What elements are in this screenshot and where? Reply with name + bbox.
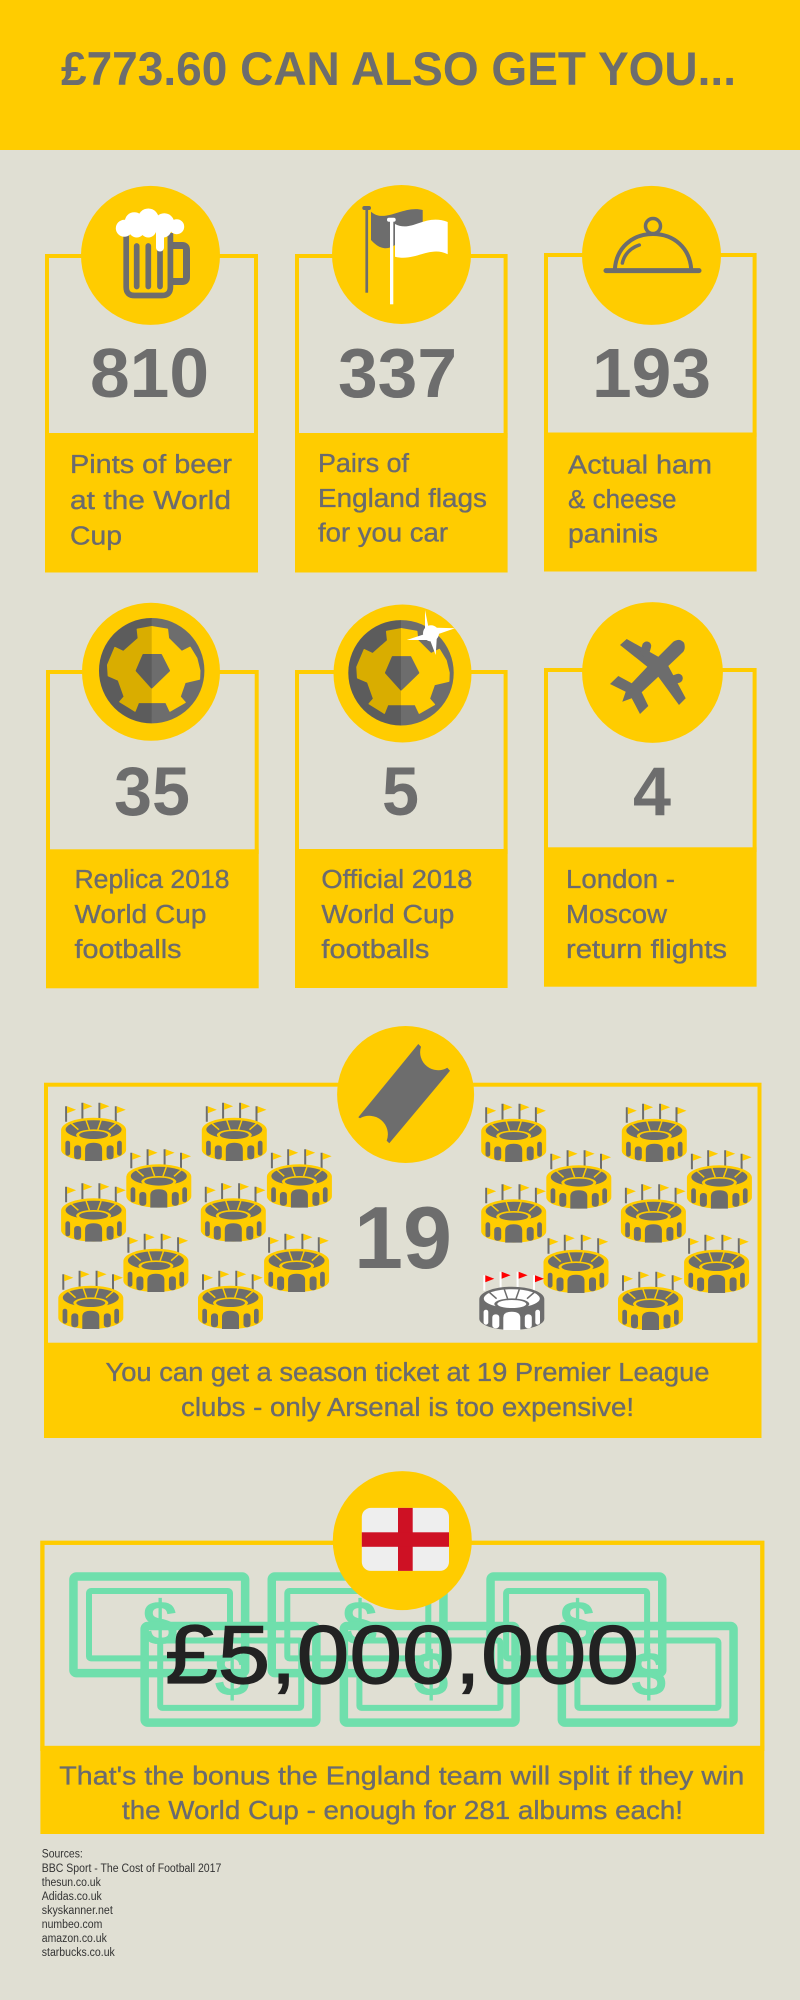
banknotes: $ [342, 1589, 377, 1659]
stadium: white Arsenal [479, 1272, 544, 1330]
panel: england flags [295, 185, 508, 572]
panel: pints of beer [45, 186, 258, 572]
label panel [295, 849, 508, 988]
caption [59, 1760, 744, 1825]
icon circle [81, 186, 220, 325]
banknotes: $ [214, 1640, 250, 1710]
sources [42, 1849, 221, 1959]
description: & cheese [568, 486, 676, 514]
caption band [40, 1746, 764, 1834]
panel: season tickets [44, 1026, 762, 1438]
description: footballs [74, 936, 182, 964]
label panel [544, 847, 757, 987]
description [321, 866, 472, 964]
number: 337 [338, 334, 457, 412]
sources: Sources: [42, 1849, 83, 1861]
description: Replica 2018 [74, 866, 230, 894]
icon circle [334, 604, 472, 742]
panel: England bonus [40, 1471, 764, 1834]
sources: skyskanner.net [42, 1905, 114, 1917]
icon: pair of flags [362, 206, 448, 304]
header band [0, 0, 800, 150]
caption: That's the bonus the England team will split if they win [59, 1760, 744, 1790]
number: 35 [114, 753, 190, 830]
number: 5 [382, 753, 419, 830]
banknotes [73, 1576, 734, 1723]
description: for you car [318, 520, 449, 548]
icon: football [99, 618, 204, 723]
icon circle [582, 602, 723, 743]
sources: amazon.co.uk [42, 1933, 107, 1945]
description: footballs [321, 936, 429, 964]
description: World Cup [321, 901, 454, 929]
sources: BBC Sport - The Cost of Football 2017 [42, 1863, 221, 1875]
title: £773.60 CAN ALSO GET YOU... [61, 42, 736, 95]
label panel [295, 433, 508, 572]
description: Pairs of [318, 450, 410, 478]
icon: football with sparkle [348, 610, 455, 726]
icon circle [332, 185, 471, 324]
caption: the World Cup - enough for 281 albums each! [122, 1795, 683, 1825]
sources: starbucks.co.uk [42, 1947, 115, 1959]
icon: England flag [362, 1508, 449, 1571]
icon circle [337, 1026, 474, 1163]
sources: Adidas.co.uk [42, 1891, 102, 1903]
description [566, 866, 727, 964]
description: Cup [70, 522, 122, 550]
number: 810 [90, 334, 209, 412]
icon circle [582, 186, 721, 325]
sources: numbeo.com [42, 1919, 102, 1931]
sources: thesun.co.uk [42, 1877, 101, 1889]
icon: beer mug [116, 208, 186, 296]
panel: official footballs [295, 604, 508, 988]
icon circle [333, 1471, 472, 1610]
description: at the World [70, 487, 231, 515]
icon: aeroplane [610, 639, 686, 714]
description: England flags [318, 485, 487, 513]
caption band [44, 1343, 762, 1438]
description: Actual ham [568, 451, 712, 479]
description [74, 866, 230, 964]
caption: clubs - only Arsenal is too expensive! [181, 1394, 634, 1422]
icon circle [82, 603, 220, 741]
number: 4 [633, 753, 671, 830]
banknotes: $ [142, 1589, 178, 1659]
icon: ticket [358, 1044, 450, 1143]
description: World Cup [74, 901, 206, 929]
label panel [45, 433, 258, 572]
number: 19 [354, 1188, 452, 1287]
description: paninis [568, 521, 658, 549]
panel: paninis [544, 186, 757, 572]
description: return flights [566, 936, 727, 964]
banknotes: $ [631, 1640, 666, 1710]
icon: food cloche [606, 218, 699, 271]
description: Official 2018 [321, 866, 472, 894]
panel: flights [544, 602, 757, 987]
description [70, 451, 233, 550]
description [318, 450, 487, 548]
banknotes: $ [560, 1589, 595, 1659]
banknotes: $ [413, 1640, 449, 1710]
caption [106, 1359, 710, 1422]
description: Moscow [566, 901, 668, 929]
big number: £5,000,000 [165, 1608, 639, 1701]
caption: You can get a season ticket at 19 Premier League [106, 1359, 710, 1387]
description: Pints of beer [70, 451, 233, 479]
label panel [544, 432, 757, 572]
description: London - [566, 866, 675, 894]
label panel [46, 849, 259, 988]
description [568, 451, 712, 549]
stadiums: yellow group [58, 1103, 752, 1330]
number: 193 [592, 334, 711, 412]
panel: replica footballs [46, 603, 259, 988]
